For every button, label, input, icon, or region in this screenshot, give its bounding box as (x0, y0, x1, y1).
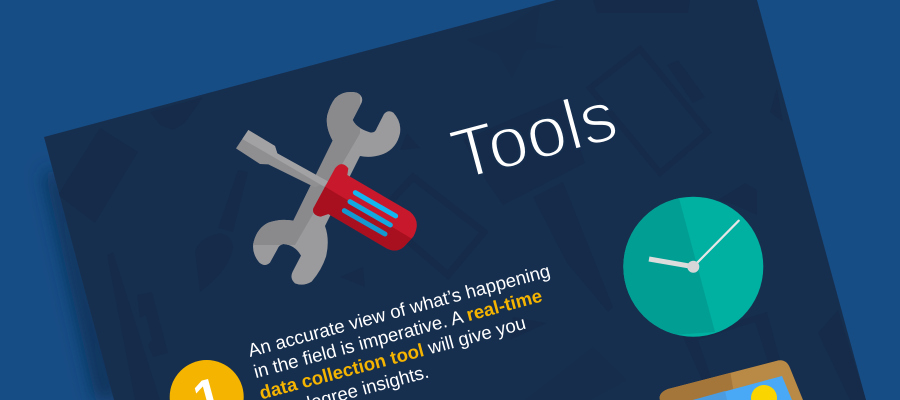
icon: top rectangle (593, 0, 690, 13)
icon: wrench and screwdriver (236, 92, 417, 285)
icon: clipboard tab (667, 60, 705, 103)
icon: clock (623, 197, 763, 337)
background icons (59, 194, 866, 400)
icon: star (466, 5, 562, 78)
icon: device under clock (683, 312, 780, 382)
icon: pen (533, 182, 613, 312)
body text: An accurate view of what’s happening (246, 260, 552, 361)
icon: brush tip (195, 233, 233, 292)
screwdriver handle (313, 164, 417, 250)
icon: left strip (107, 252, 160, 400)
icon: triangle below wrench (340, 267, 365, 287)
wrench (253, 92, 400, 285)
icon: clipboard (590, 49, 708, 173)
icon: lower box (525, 347, 627, 400)
icon: blob above clock (718, 183, 757, 215)
card shadow (44, 172, 122, 400)
icon: brush stem (218, 170, 248, 232)
title: Tools (443, 75, 625, 196)
icon: device screen (698, 322, 768, 380)
icon: top marker (150, 97, 203, 130)
icon: tablet (378, 177, 484, 275)
icon: small triangle right of wrench (400, 133, 420, 150)
handle stripes (344, 193, 396, 234)
number badge (170, 360, 244, 400)
icon: small triangle under text (510, 317, 547, 340)
icon: block behind title (463, 97, 585, 205)
body text: in the field is imperative. A real-time (251, 285, 544, 382)
icon: left tab (137, 292, 168, 357)
screwdriver shaft (236, 130, 328, 187)
icon: dark shape right edge (770, 88, 783, 122)
icon: phone (59, 194, 60, 196)
icon: dark shape lower right (865, 398, 866, 400)
icon: picture frame (660, 360, 803, 400)
